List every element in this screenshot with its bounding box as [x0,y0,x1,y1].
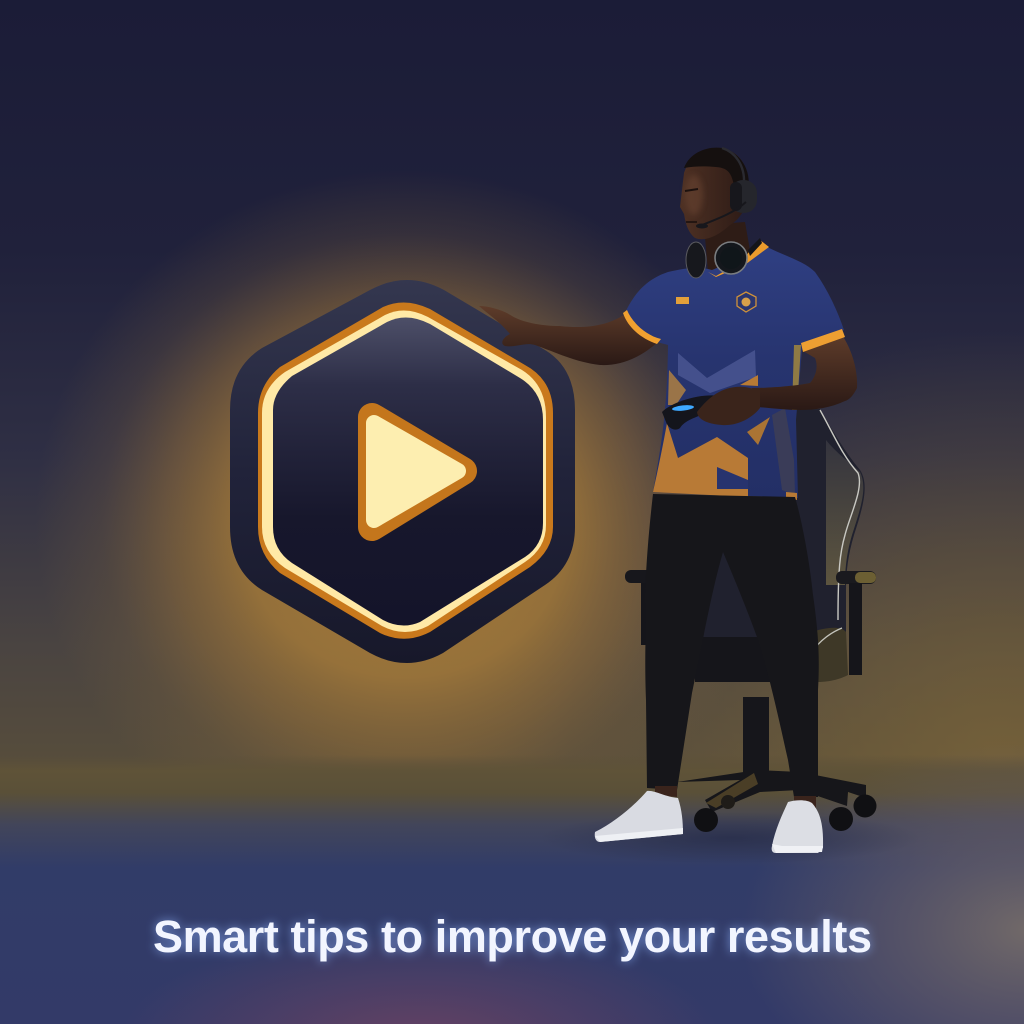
armrests [625,570,876,675]
wheels [694,808,718,832]
headset on head [696,148,757,228]
chest logo [676,297,689,304]
column [743,697,769,775]
play triangle [372,417,463,527]
gaming chair [625,409,876,832]
collar [708,240,769,277]
face details [685,175,703,222]
caption: Smart tips to improve your results [153,911,872,962]
star base [677,770,866,812]
neck [705,222,750,270]
badge outer body [230,280,575,663]
right sleeve cuff [801,329,845,352]
floor [0,740,1024,1024]
near arm [752,335,857,410]
chair side bolster [826,440,863,585]
trousers [645,494,819,797]
caption: Smart tips to improve your results [153,911,872,962]
hair [684,148,749,182]
game controller [662,395,720,430]
left sleeve cuff [623,310,661,344]
glowing ring [258,302,553,639]
jersey geometric pattern [678,350,756,393]
chair piping [820,410,859,620]
crest [737,292,756,312]
chair back [700,409,865,650]
jersey body and sleeves [624,247,844,498]
left sneaker [595,791,683,842]
head [680,152,742,240]
background wall [0,185,1024,770]
far arm holding badge [479,306,658,365]
hand holding controller [697,387,760,425]
ankle skin [655,786,677,797]
badge inner face [273,317,543,626]
right sneaker [772,800,823,853]
play badge: glowing hexagon [230,280,575,663]
jersey [623,240,844,500]
seat [695,628,848,682]
headset around neck [686,238,762,278]
gamer figure [479,148,857,853]
